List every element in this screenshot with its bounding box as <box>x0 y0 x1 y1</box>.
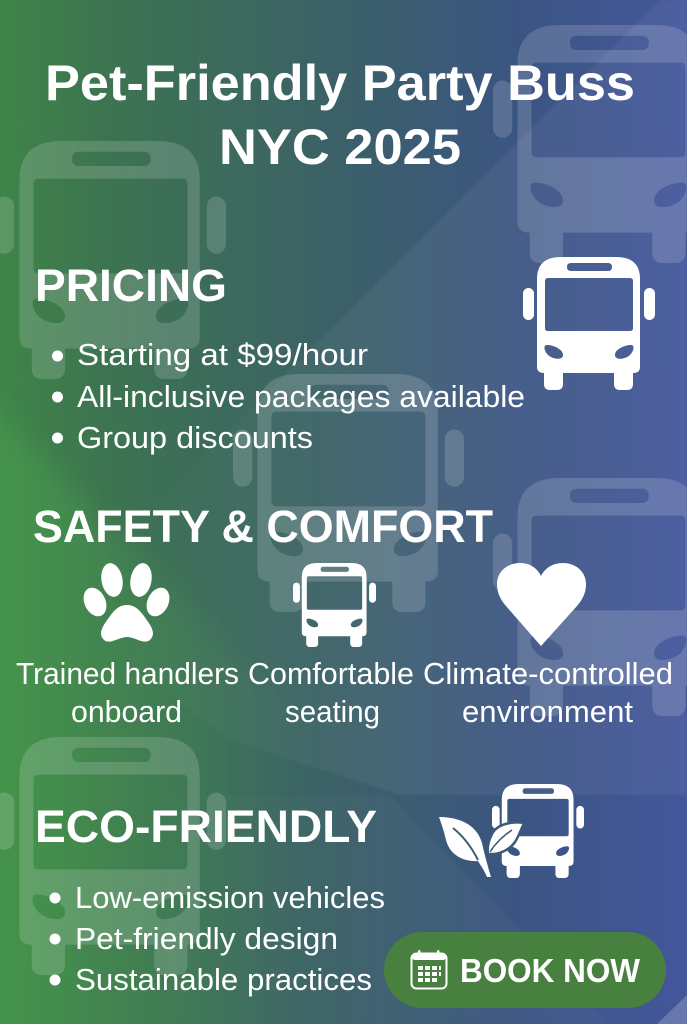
pricing list <box>52 337 525 455</box>
eco list: Sustainable practices <box>75 962 372 997</box>
feature: climate control <box>423 656 673 729</box>
icon: paw <box>79 561 174 642</box>
feature: trained handlers: Trained handlers <box>16 656 239 691</box>
eco list <box>50 880 385 997</box>
feature: comfortable seating: Comfortable <box>248 656 414 691</box>
title <box>45 55 635 175</box>
panel: eco-friendly <box>35 784 584 997</box>
title: NYC 2025 <box>219 119 461 175</box>
feature: trained handlers: onboard <box>71 694 182 729</box>
pricing list: Starting at $99/hour <box>77 337 368 372</box>
pricing list: All-inclusive packages available <box>77 379 525 414</box>
safety heading: SAFETY & COMFORT <box>33 501 493 552</box>
title: Pet-Friendly Party Buss <box>45 55 635 111</box>
button: book now <box>384 932 666 1008</box>
button label: BOOK NOW <box>460 952 641 989</box>
pricing heading: PRICING <box>35 260 227 311</box>
feature: comfortable seating <box>248 656 414 729</box>
icon: calendar <box>412 950 446 988</box>
feature: comfortable seating: seating <box>285 694 380 729</box>
feature: climate control: environment <box>462 694 633 729</box>
eco list: Low-emission vehicles <box>75 880 385 915</box>
eco list: Pet-friendly design <box>75 921 338 956</box>
feature: climate control: Climate-controlled <box>423 656 673 691</box>
panel: pricing <box>35 257 655 455</box>
icon: heart <box>497 563 586 646</box>
pricing list: Group discounts <box>77 420 313 455</box>
feature: trained handlers <box>16 656 239 729</box>
panel: safety and comfort <box>16 501 673 729</box>
eco heading: ECO-FRIENDLY <box>35 801 377 852</box>
icon: bus <box>293 563 376 647</box>
icon: bus with leaves <box>439 784 584 878</box>
icon: bus <box>523 257 655 390</box>
